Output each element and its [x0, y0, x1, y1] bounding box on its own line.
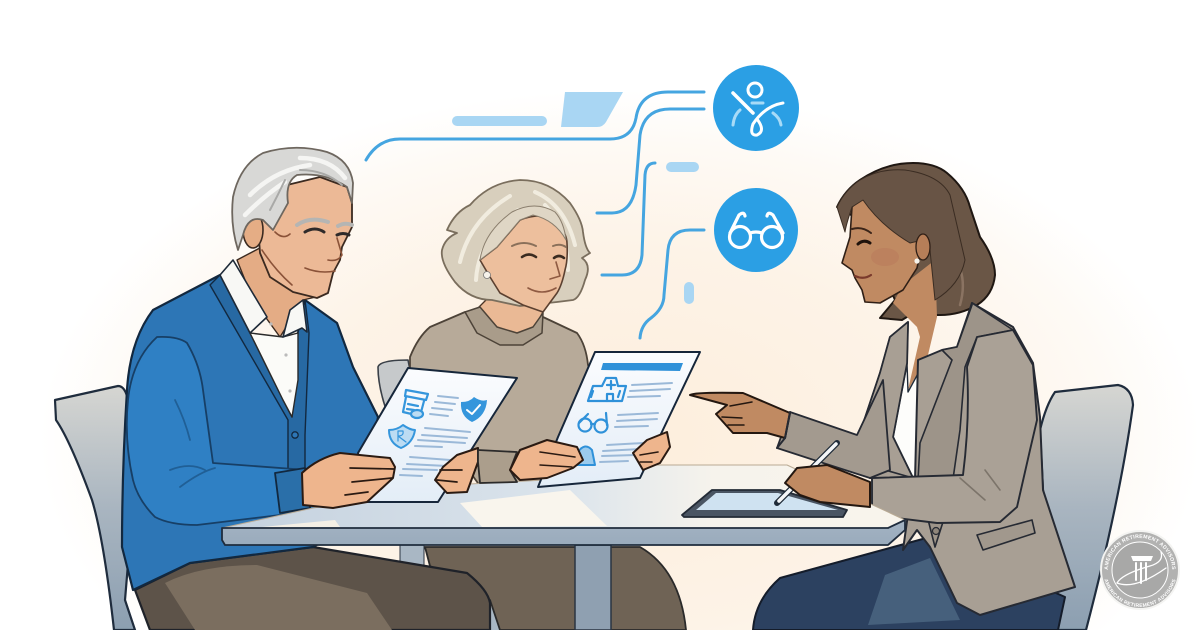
document: right: [538, 352, 700, 487]
icon: basket: [577, 446, 595, 465]
hair: [232, 148, 353, 250]
icon: check shield: [461, 397, 487, 422]
stylus: [777, 443, 837, 503]
hands: woman: [510, 432, 670, 480]
lower sleeve: [872, 330, 1037, 523]
chair: right: [1040, 385, 1133, 630]
hair: [442, 180, 590, 306]
chair: left: [55, 386, 135, 630]
jacket: [860, 303, 1075, 615]
eyes: [305, 229, 349, 235]
eyes brows mouth: [512, 243, 566, 247]
icon: hospital: [588, 378, 626, 401]
floating accent shapes: [452, 92, 699, 304]
icon: medicine bottle: [403, 390, 428, 418]
left jacket panel: [860, 322, 913, 478]
text lines: [400, 396, 470, 476]
neck: [237, 240, 320, 337]
earring: [484, 272, 490, 278]
blush: [871, 248, 899, 266]
sleeve folds: [170, 400, 215, 487]
table edge: [222, 520, 905, 545]
neck: [478, 293, 543, 335]
hair highlights: [245, 158, 345, 215]
hand: advisor writing: [785, 465, 870, 507]
cardigan: [122, 275, 378, 590]
icon: Rx shield: [389, 425, 415, 448]
logo badge: AMERICAN RETIREMENT ADVISORS: [1104, 534, 1176, 570]
document: left: [358, 368, 517, 502]
hair highlights: [880, 184, 963, 305]
cardigan band: [210, 275, 309, 495]
ear: [243, 212, 263, 248]
table top: [222, 465, 905, 528]
tablet: [682, 490, 847, 517]
light patch: [460, 490, 607, 527]
thigh highlight: [165, 565, 392, 630]
right lapel: [918, 303, 1013, 547]
sweater: [410, 312, 600, 486]
sleeve: [127, 337, 310, 525]
person: man: [122, 148, 490, 630]
blouse: [893, 357, 927, 480]
icon: accessibility circle: [713, 65, 799, 151]
ribbed collar: [465, 307, 543, 345]
cuff: [275, 468, 310, 513]
person: advisor: [777, 163, 1075, 615]
hair fringe: [837, 170, 965, 300]
hands: man: [302, 448, 478, 508]
hand: advisor pointing: [690, 393, 790, 438]
woman cuff: [478, 450, 517, 483]
shirt buttons: [269, 322, 273, 326]
person: woman: [410, 180, 600, 486]
brows: [297, 220, 352, 226]
nose mouth lines: [262, 232, 342, 285]
trousers: [135, 547, 490, 630]
pocket: [977, 520, 1035, 550]
table: [222, 465, 905, 545]
text lines: [600, 383, 672, 462]
icon: glasses: [578, 413, 608, 432]
face: [842, 190, 925, 303]
shirt: [250, 333, 298, 417]
hair highlights: [460, 192, 575, 280]
neck: [893, 260, 937, 390]
earring: [914, 258, 920, 264]
ear: [916, 234, 930, 260]
head: [258, 177, 352, 298]
logo badge: [1100, 530, 1180, 610]
table leg: [575, 545, 611, 630]
hair: [837, 163, 995, 320]
connector lines: [366, 92, 704, 338]
logo badge: AMERICAN RETIREMENT ADVISORS: [1104, 579, 1176, 607]
advisor trousers: [753, 537, 1065, 630]
forearm cuff: [777, 412, 790, 448]
chair: centre: [378, 360, 420, 420]
button: [292, 432, 298, 438]
trouser highlight: [868, 558, 960, 625]
forearm sleeve: [777, 380, 890, 478]
woman trousers: [425, 547, 686, 630]
icon: glasses circle: [714, 188, 798, 272]
collar: [220, 260, 307, 337]
face: [480, 216, 567, 312]
eye brow mouth: [852, 228, 871, 233]
hair fringe: [480, 206, 566, 260]
